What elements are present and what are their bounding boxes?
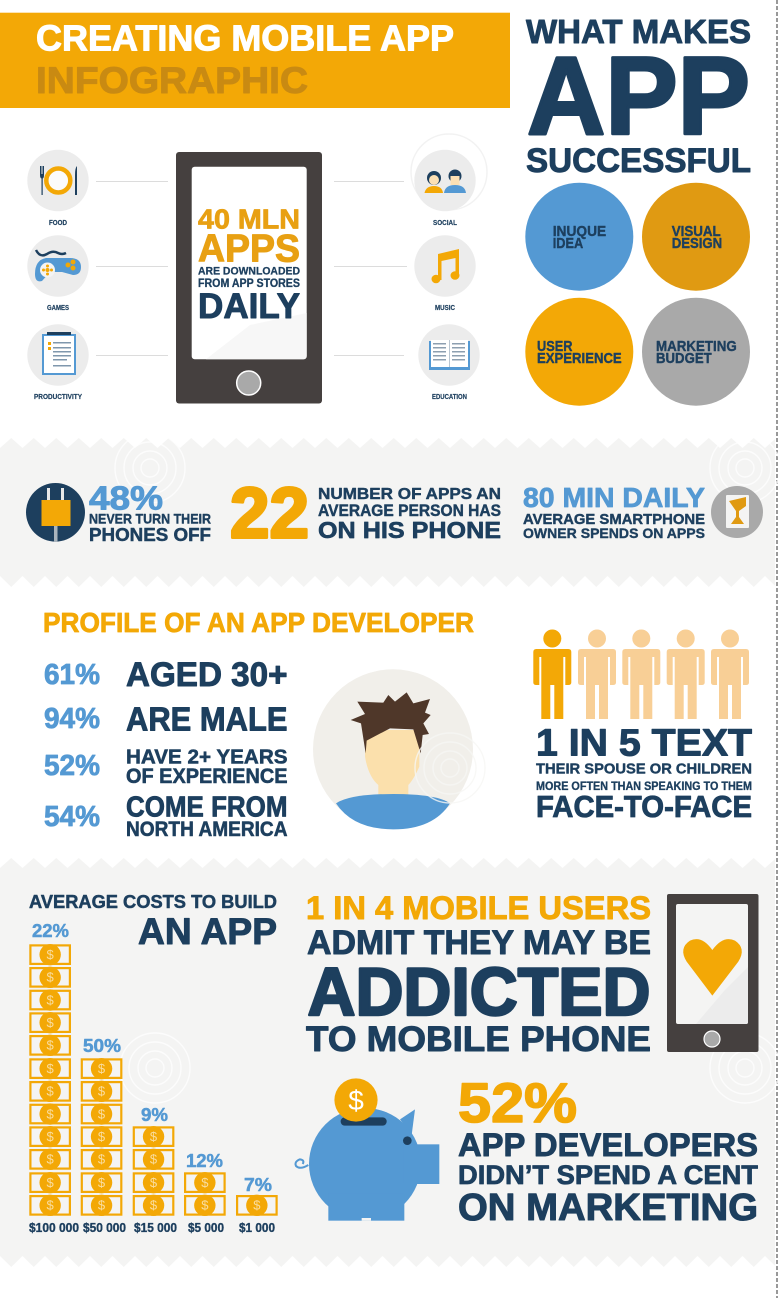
bar: 5 000: 12% [186,1151,223,1171]
icon: piggy bank [295,1078,439,1221]
text: one in five text: THEIR SPOUSE OR CHILDREN [536,761,752,777]
icon: phone hourglass [711,486,763,538]
phone headline: 40 MLN [198,203,300,234]
bar: 5 000: $$ [201,1175,209,1213]
bar: 100 000: $$$$$$$$$$$$ [46,947,54,1213]
stat: 80 min daily: 80 MIN DAILY [523,482,705,513]
circle: unique idea: IDEA [553,236,584,252]
text: 52 percent developers: DIDN’T SPEND A CENT [458,1160,759,1190]
heading: what makes app successful: WHAT MAKES [526,14,751,51]
circle: visual design: VISUAL [672,224,721,240]
profile stat: experience [44,745,288,788]
text: 52 percent developers: APP DEVELOPERS [458,1127,758,1163]
bar chart: money stacks [29,921,278,1235]
bar: 15 000: 9% [141,1105,168,1125]
circle: marketing budget: MARKETING [656,339,737,355]
stat: 80 min daily: OWNER SPENDS ON APPS [523,525,705,541]
phone headline: APPS [198,227,300,270]
phone headline: FROM APP STORES [198,278,300,290]
title line one: CREATING MOBILE APP [36,17,454,58]
title banner [0,13,510,108]
icon: phone with heart [667,894,758,1052]
profile stat: north america: COME FROM [126,791,288,823]
phone headline: DAILY [198,287,300,326]
circle: visual design [642,183,750,291]
profile stat: male [44,700,288,737]
bar: 50 000 [81,1036,126,1235]
icon: food [27,150,89,227]
heading: what makes app successful: SUCCESSFUL [526,142,751,180]
text: 52 percent developers: ON MARKETING [458,1187,758,1229]
bar: 15 000 [133,1105,177,1235]
bar: 50 000: $50 000 [83,1220,126,1235]
profile stat: experience: 52% [44,750,100,782]
bar: 100 000: 22% [32,921,69,941]
central phone [176,152,322,404]
icon: education [418,324,480,401]
circle: marketing budget [642,298,750,406]
bar: 100 000: $100 000 [29,1220,79,1235]
icon: social [411,134,487,227]
profile stat: aged: AGED 30+ [126,656,288,694]
stat: 48 percent: NEVER TURN THEIR [89,511,211,526]
heading: average costs [29,892,277,952]
text: addicted [306,890,651,1059]
stat: 80 min daily [523,482,705,541]
text: one in five text: 1 IN 5 TEXT [536,722,752,764]
bar: 1 000 [236,1175,278,1235]
bar: 5 000 [184,1151,226,1235]
label: MUSIC [435,303,455,312]
profile stat: north america: NORTH AMERICA [126,817,288,841]
label: GAMES [47,303,69,312]
circle: user experience: EXPERIENCE [537,351,622,367]
profile stat: aged: 61% [44,659,100,691]
stat: 22 apps: AVERAGE PERSON HAS [318,502,501,520]
profile stat: north america [44,791,288,841]
circle: unique idea [525,183,633,291]
stat: 80 min daily: AVERAGE SMARTPHONE [523,511,705,528]
bar: 50 000: 50% [83,1036,121,1056]
heading: profile of an app developer: PROFILE OF AN APP DEVELOPER [43,607,474,638]
text: addicted: TO MOBILE PHONE [306,1020,651,1059]
text: 52 percent developers: 52% [458,1071,577,1134]
icon: music [414,235,476,312]
text: 52 percent developers [458,1071,759,1229]
phone headline [198,203,300,326]
profile stat: aged [44,656,288,694]
label: PRODUCTIVITY [34,392,82,401]
profile stat: experience: HAVE 2+ YEARS [126,745,288,768]
connector lines [96,182,407,356]
people pictogram: one in five [533,630,749,719]
text: addicted: ADDICTED [308,954,650,1030]
icon: plug [26,483,85,542]
stat: 22 apps: ON HIS PHONE [318,517,501,543]
text: one in five text: FACE-TO-FACE [536,789,752,824]
text: addicted: ADMIT THEY MAY BE [307,924,651,962]
text: one in five text: MORE OFTEN THAN SPEAKING TO THEM [536,781,752,793]
bar: 50 000: $$$$$$$ [98,1061,106,1213]
phone headline: ARE DOWNLOADED [198,265,300,277]
circle: user experience [525,298,633,406]
text: addicted: 1 IN 4 MOBILE USERS [306,890,651,926]
stat: 48 percent [89,479,211,545]
developer avatar [313,669,485,829]
label: EDUCATION [432,392,467,401]
heading: what makes app successful: APP [527,35,750,158]
circle: visual design: DESIGN [672,236,722,252]
circle: unique idea: INUQUE [553,224,606,240]
stat: 22 apps [230,474,501,554]
title line two: INFOGRAPHIC [36,60,308,101]
text: one in five text [536,722,752,824]
heading: average costs: AN APP [138,911,277,952]
coin: $ [348,1085,364,1116]
label: FOOD [49,218,67,227]
heading: average costs: AVERAGE COSTS TO BUILD [29,892,277,912]
label: SOCIAL [433,218,458,227]
profile stat: male: ARE MALE [126,700,288,737]
stat: 48 percent: 48% [89,479,163,516]
stat: 22 apps: NUMBER OF APPS AN [318,486,501,503]
bar: 5 000: $5 000 [188,1220,224,1235]
profile stat: male: 94% [44,703,100,735]
coin [334,1078,378,1122]
bar: 1 000: $ [253,1198,261,1213]
bar: 100 000 [29,921,79,1235]
stat: 48 percent: PHONES OFF [89,525,211,545]
circle: marketing budget: BUDGET [656,351,712,367]
stat: 22 apps: 22 [230,474,309,554]
profile stat: experience: OF EXPERIENCE [126,764,288,788]
icon: games [27,235,89,312]
bar: 15 000: $15 000 [134,1220,177,1235]
icon: productivity [27,324,89,401]
profile stat: north america: 54% [44,801,100,833]
circle: user experience: USER [537,339,573,355]
bar: 1 000: 7% [244,1175,272,1195]
bar: 1 000: $1 000 [239,1220,275,1235]
bar: 15 000: $$$$ [150,1129,158,1213]
